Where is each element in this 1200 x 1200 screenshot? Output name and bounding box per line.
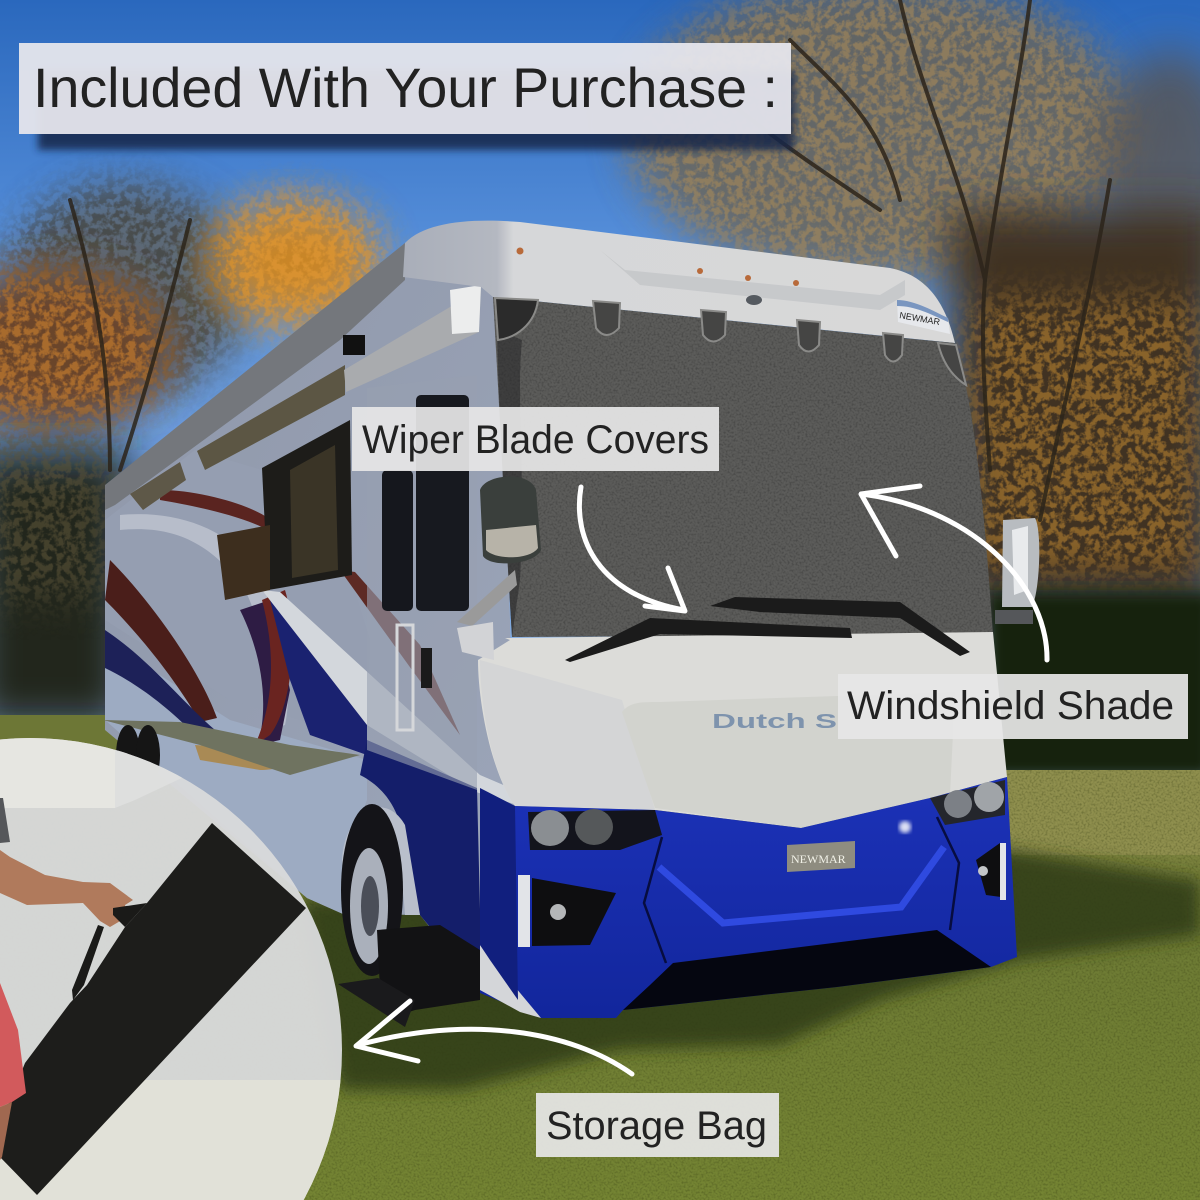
fog lamp left xyxy=(518,875,616,947)
arrow: wiper blade covers xyxy=(579,487,685,611)
side lower navy xyxy=(360,740,482,990)
Newmar roof logo: NEWMAR xyxy=(899,310,941,327)
black bag xyxy=(0,823,306,1195)
bumper seams xyxy=(644,837,666,963)
front wheel xyxy=(341,804,403,976)
tree: left dark mass xyxy=(0,450,130,730)
bag handle xyxy=(113,903,147,927)
bumper highlight xyxy=(659,847,944,923)
person leg xyxy=(0,1102,12,1160)
door xyxy=(367,375,477,790)
mirror left xyxy=(457,476,541,660)
label: storage bag: Storage Bag xyxy=(546,1104,767,1148)
headlight left xyxy=(528,809,662,850)
Newmar roof logo xyxy=(897,300,950,334)
rear wheels xyxy=(116,725,140,785)
background: autumn trees xyxy=(0,0,1200,780)
shade tabs xyxy=(495,298,966,385)
background: grass xyxy=(0,715,1200,1200)
Newmar front badge: NEWMAR xyxy=(791,852,846,866)
arrow: storage bag xyxy=(356,1001,632,1074)
storage bag circle xyxy=(0,730,350,1200)
wipers xyxy=(565,618,852,662)
person shirt xyxy=(0,798,10,843)
label: wiper blade covers xyxy=(352,407,719,471)
title: Included With Your Purchase : xyxy=(33,56,778,119)
label: windshield shade xyxy=(838,674,1188,739)
awning box xyxy=(344,287,481,392)
fog lamp right xyxy=(976,843,1006,900)
Dutch Star badge: Dutch S xyxy=(712,711,837,733)
tree: right dark mass xyxy=(950,210,1200,610)
arrow: windshield shade xyxy=(861,486,1047,660)
navy swoosh xyxy=(270,600,367,755)
tree: left pale branches xyxy=(10,185,250,395)
person shorts xyxy=(0,983,26,1107)
roof band xyxy=(105,243,405,510)
tree: far right crown xyxy=(1100,50,1200,290)
bag strap xyxy=(72,925,104,1000)
label: storage bag xyxy=(536,1093,779,1157)
roof camera xyxy=(746,295,762,305)
left navy band xyxy=(480,788,518,1000)
background: sky xyxy=(0,0,1200,770)
door maroon stripe xyxy=(340,570,460,735)
tree: orange xyxy=(217,204,373,320)
glint xyxy=(899,821,911,833)
ground shadow xyxy=(300,850,1200,1090)
label: wiper blade covers: Wiper Blade Covers xyxy=(362,418,709,462)
awning tube xyxy=(130,462,186,510)
Newmar front badge xyxy=(787,841,855,872)
front cap xyxy=(403,221,955,343)
white stripe xyxy=(262,590,520,806)
steps xyxy=(338,925,480,1027)
side graphics xyxy=(103,450,520,914)
RV body xyxy=(103,221,1039,1027)
tree: left orange brown xyxy=(0,270,170,430)
tree: bare branches xyxy=(70,0,1110,520)
headlight right xyxy=(930,780,1005,825)
side window xyxy=(262,420,352,590)
tree: right evergreen xyxy=(985,590,1200,780)
bumper dark underside xyxy=(623,930,991,1010)
tree: top right canopy xyxy=(630,0,1130,280)
title shadow xyxy=(38,70,794,150)
roof marker lights xyxy=(516,248,799,286)
left white corner xyxy=(480,945,541,1018)
fender xyxy=(342,807,420,915)
RV side wall xyxy=(105,240,520,1000)
title xyxy=(19,43,791,134)
front lower white xyxy=(478,632,1007,828)
reflection panel xyxy=(217,525,270,600)
person arm xyxy=(0,850,133,927)
label: windshield shade: Windshield Shade xyxy=(847,684,1174,728)
blue bumper xyxy=(480,777,1017,1018)
windshield shade xyxy=(493,297,993,637)
mirror right xyxy=(995,518,1039,624)
reflection panels xyxy=(105,450,370,755)
disc xyxy=(0,730,350,1200)
